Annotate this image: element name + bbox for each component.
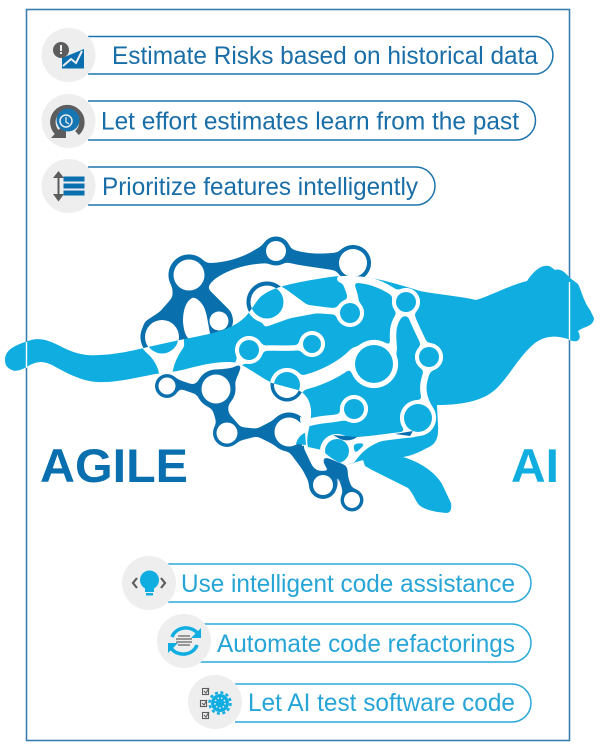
dark neural network <box>140 236 371 512</box>
network holes <box>145 241 367 508</box>
item: effort estimates <box>42 94 536 148</box>
text: Estimate Risks based on historical data <box>112 43 538 70</box>
item: prioritize features <box>42 159 435 213</box>
icon: checklist gear <box>188 675 242 729</box>
item: test software <box>188 675 531 729</box>
heading: AGILE: AGILE <box>40 440 188 493</box>
white channels <box>140 277 443 468</box>
text: Prioritize features intelligently <box>102 174 419 201</box>
text: Let effort estimates learn from the past <box>101 108 519 136</box>
light crescent <box>296 433 306 445</box>
icon: history clock <box>42 94 96 148</box>
icon: risk chart <box>42 28 96 82</box>
cheetah silhouette <box>5 266 594 513</box>
text: Let AI test software code <box>248 690 515 717</box>
frame gaps across the cheetah <box>26 282 570 368</box>
icon: light bulb code <box>122 556 176 610</box>
item: refactorings <box>157 614 531 668</box>
item: estimate risks <box>42 28 553 82</box>
cheetah illustration <box>5 236 594 513</box>
icon: priority list <box>42 159 96 213</box>
text: Use intelligent code assistance <box>181 571 515 598</box>
text: Automate code refactorings <box>217 631 515 658</box>
icon: refactor arrows <box>157 614 211 668</box>
heading: AI: AI <box>511 440 559 493</box>
item: code assistance <box>122 556 531 610</box>
dark slivers <box>333 431 413 440</box>
light nodes <box>146 286 439 463</box>
